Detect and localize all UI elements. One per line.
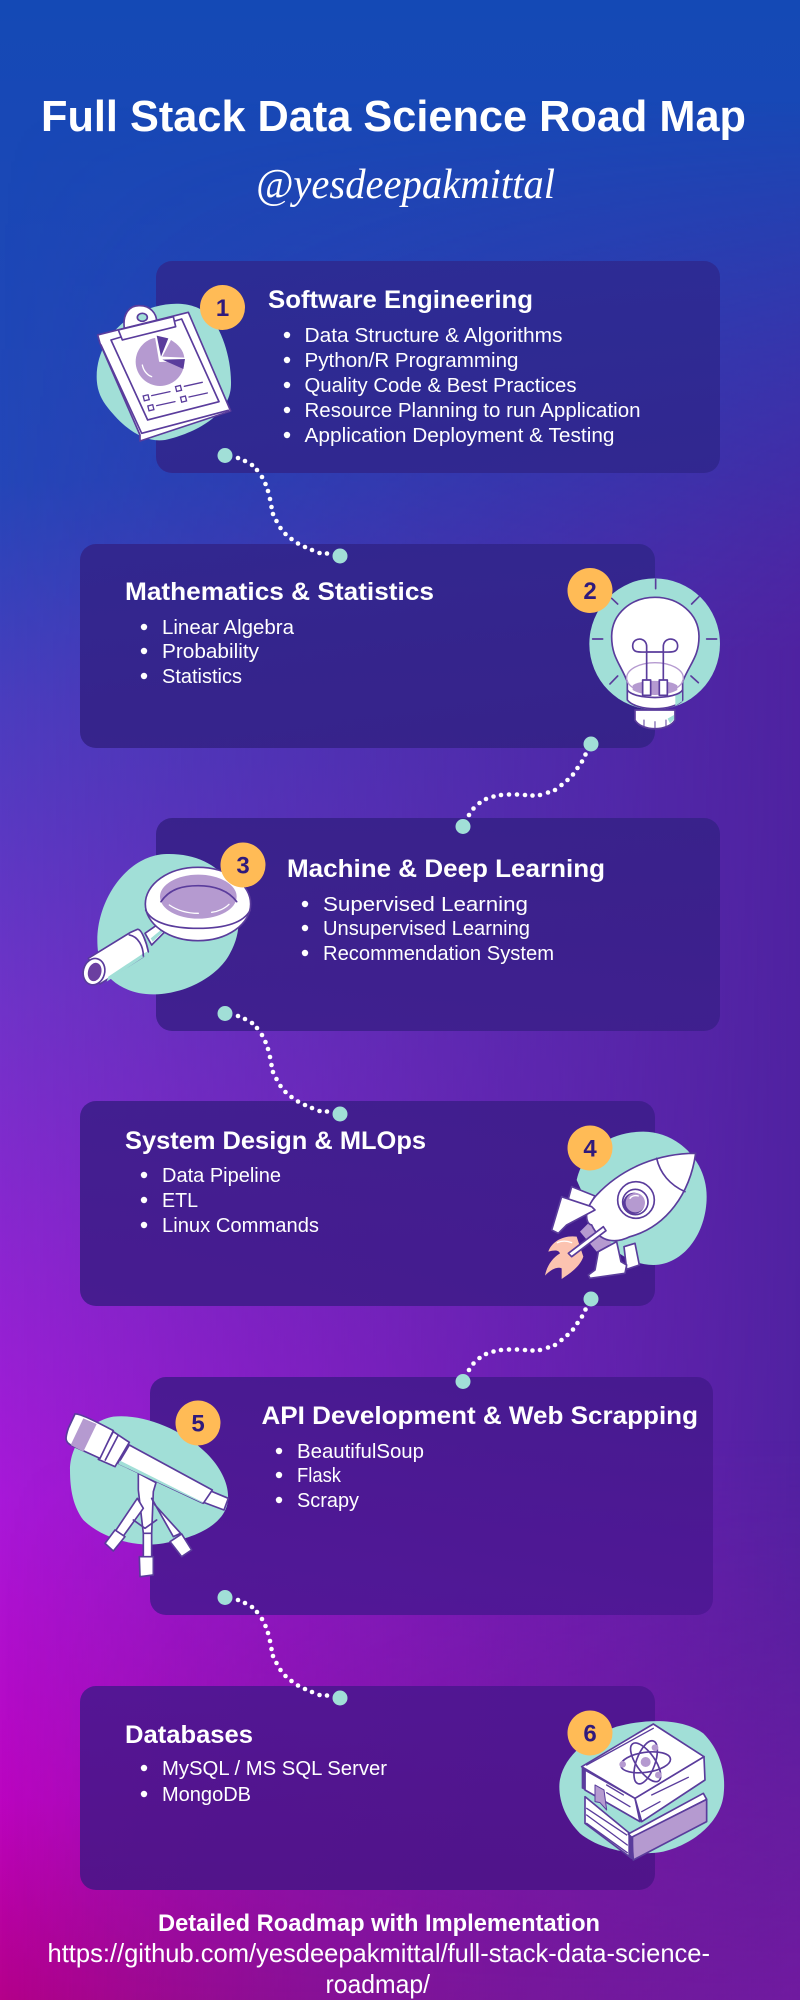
list 5: BeautifulSoup <box>297 1441 424 1463</box>
list 3: Supervised Learning <box>323 894 528 916</box>
heading 3: Machine & Deep Learning <box>287 855 605 883</box>
list 1 <box>284 325 640 447</box>
list 4: ETL <box>162 1190 198 1212</box>
footer link: roadmap/ <box>326 1969 431 1999</box>
badge 4: 4 <box>583 1136 597 1162</box>
panel 1: Software Engineering <box>97 261 720 473</box>
list 5 <box>276 1441 424 1512</box>
badge 6 <box>568 1710 612 1756</box>
panel 4: System Design & MLOps <box>80 1101 707 1306</box>
icon: light bulb <box>589 578 720 729</box>
list 4: Data Pipeline <box>162 1165 281 1187</box>
list 3: Unsupervised Learning <box>323 918 530 940</box>
footer heading: Detailed Roadmap with Implementation <box>158 1910 600 1937</box>
list 1: Quality Code & Best Practices <box>304 375 576 397</box>
badge 5: 5 <box>191 1410 205 1438</box>
connector 3 <box>218 1006 348 1122</box>
list 2 <box>141 617 295 688</box>
badge 1: 1 <box>216 295 229 322</box>
panel 3: Machine & Deep Learning <box>80 818 720 1031</box>
panel 2: Mathematics & Statistics <box>80 544 720 748</box>
subtitle handle: @yesdeepakmittal <box>256 162 555 208</box>
heading 2: Mathematics & Statistics <box>125 578 434 606</box>
connector 2 <box>456 736 598 834</box>
list 3 <box>302 894 554 965</box>
list 1: Data Structure & Algorithms <box>304 325 562 347</box>
list 2: Statistics <box>162 666 242 688</box>
heading 5: API Development & Web Scrapping <box>262 1402 698 1430</box>
icon: magnifying glass <box>80 854 251 994</box>
icon: telescope <box>66 1414 228 1577</box>
panel 6: Databases <box>80 1686 724 1890</box>
list 1: Application Deployment & Testing <box>304 425 614 447</box>
list 6: MongoDB <box>162 1784 251 1806</box>
badge 5 <box>176 1400 220 1446</box>
badge 1 <box>200 285 245 330</box>
list 4: Linux Commands <box>162 1215 319 1237</box>
list 4 <box>141 1165 319 1237</box>
badge 2: 2 <box>583 578 597 605</box>
panel 5: API Development & Web Scrapping <box>66 1377 713 1615</box>
list 2: Linear Algebra <box>162 617 295 639</box>
connector 5 <box>218 1590 348 1706</box>
footer link: https://github.com/yesdeepakmittal/full-stack-data-science- <box>48 1938 710 1968</box>
badge 6: 6 <box>583 1720 597 1748</box>
connector 1 <box>218 448 348 564</box>
list 1: Resource Planning to run Application <box>304 400 640 422</box>
list 6: MySQL / MS SQL Server <box>162 1758 387 1780</box>
list 5: Flask <box>297 1465 342 1487</box>
list 5: Scrapy <box>297 1490 359 1512</box>
heading 6: Databases <box>125 1721 253 1749</box>
heading 1: Software Engineering <box>268 286 533 314</box>
list 2: Probability <box>162 641 259 663</box>
heading 4: System Design & MLOps <box>125 1127 426 1155</box>
badge 3 <box>220 842 266 888</box>
list 1: Python/R Programming <box>304 350 518 372</box>
connector 4 <box>456 1292 598 1389</box>
title: Full Stack Data Science Road Map <box>41 92 746 141</box>
list 6 <box>141 1758 387 1806</box>
badge 4 <box>568 1126 612 1170</box>
icon: books with atom <box>559 1721 724 1860</box>
list 3: Recommendation System <box>323 943 554 965</box>
icon: clipboard with pie chart <box>97 304 231 441</box>
badge 3: 3 <box>236 852 250 880</box>
footer link <box>48 1938 710 1999</box>
icon: rocket <box>545 1132 707 1279</box>
badge 2 <box>568 568 612 613</box>
